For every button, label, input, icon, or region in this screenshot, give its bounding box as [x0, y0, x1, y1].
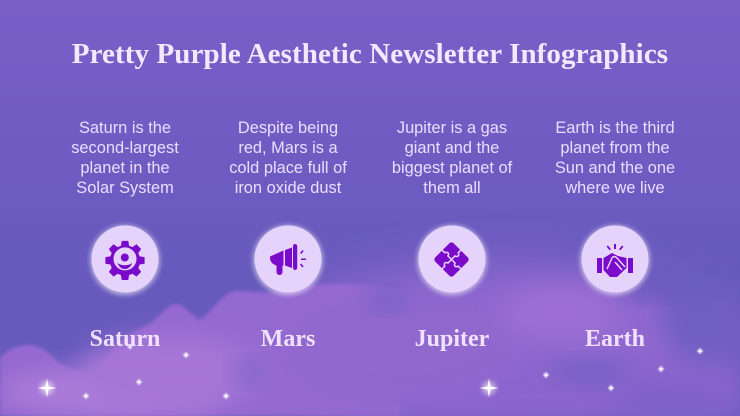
text: Mars description: cold place full of [229, 159, 347, 177]
text: Jupiter description: Jupiter is a gas [397, 119, 507, 137]
text: Jupiter description: biggest planet of [392, 159, 512, 177]
text: Earth description: Sun and the one [555, 159, 675, 177]
text: Jupiter description [392, 119, 512, 197]
text: Mars description: iron oxide dust [235, 179, 341, 197]
text: Saturn description [71, 119, 179, 197]
label: Earth: Earth [585, 326, 645, 352]
text: Earth description: planet from the [560, 139, 670, 157]
text: Jupiter description: them all [423, 179, 481, 197]
text: Earth description: Earth is the third [555, 119, 675, 137]
text: Saturn description: Solar System [76, 179, 174, 197]
label: Jupiter: Jupiter [415, 326, 489, 352]
text: Mars description: Despite being [238, 119, 338, 137]
text: Earth description: where we live [565, 179, 665, 197]
stars [38, 344, 704, 400]
label: Mars: Mars [261, 326, 315, 352]
text: Saturn description: Saturn is the [79, 119, 171, 137]
text: Jupiter description: giant and the [405, 139, 499, 157]
text: Earth description [555, 119, 675, 197]
text: Saturn description: planet in the [80, 159, 170, 177]
clouds [0, 264, 740, 416]
text: Saturn description: second-largest [71, 139, 179, 157]
title: Pretty Purple Aesthetic Newsletter Infographics [72, 38, 668, 70]
text: Mars description [229, 119, 347, 197]
text: Mars description: red, Mars is a [238, 139, 338, 157]
label: Saturn: Saturn [90, 326, 160, 352]
